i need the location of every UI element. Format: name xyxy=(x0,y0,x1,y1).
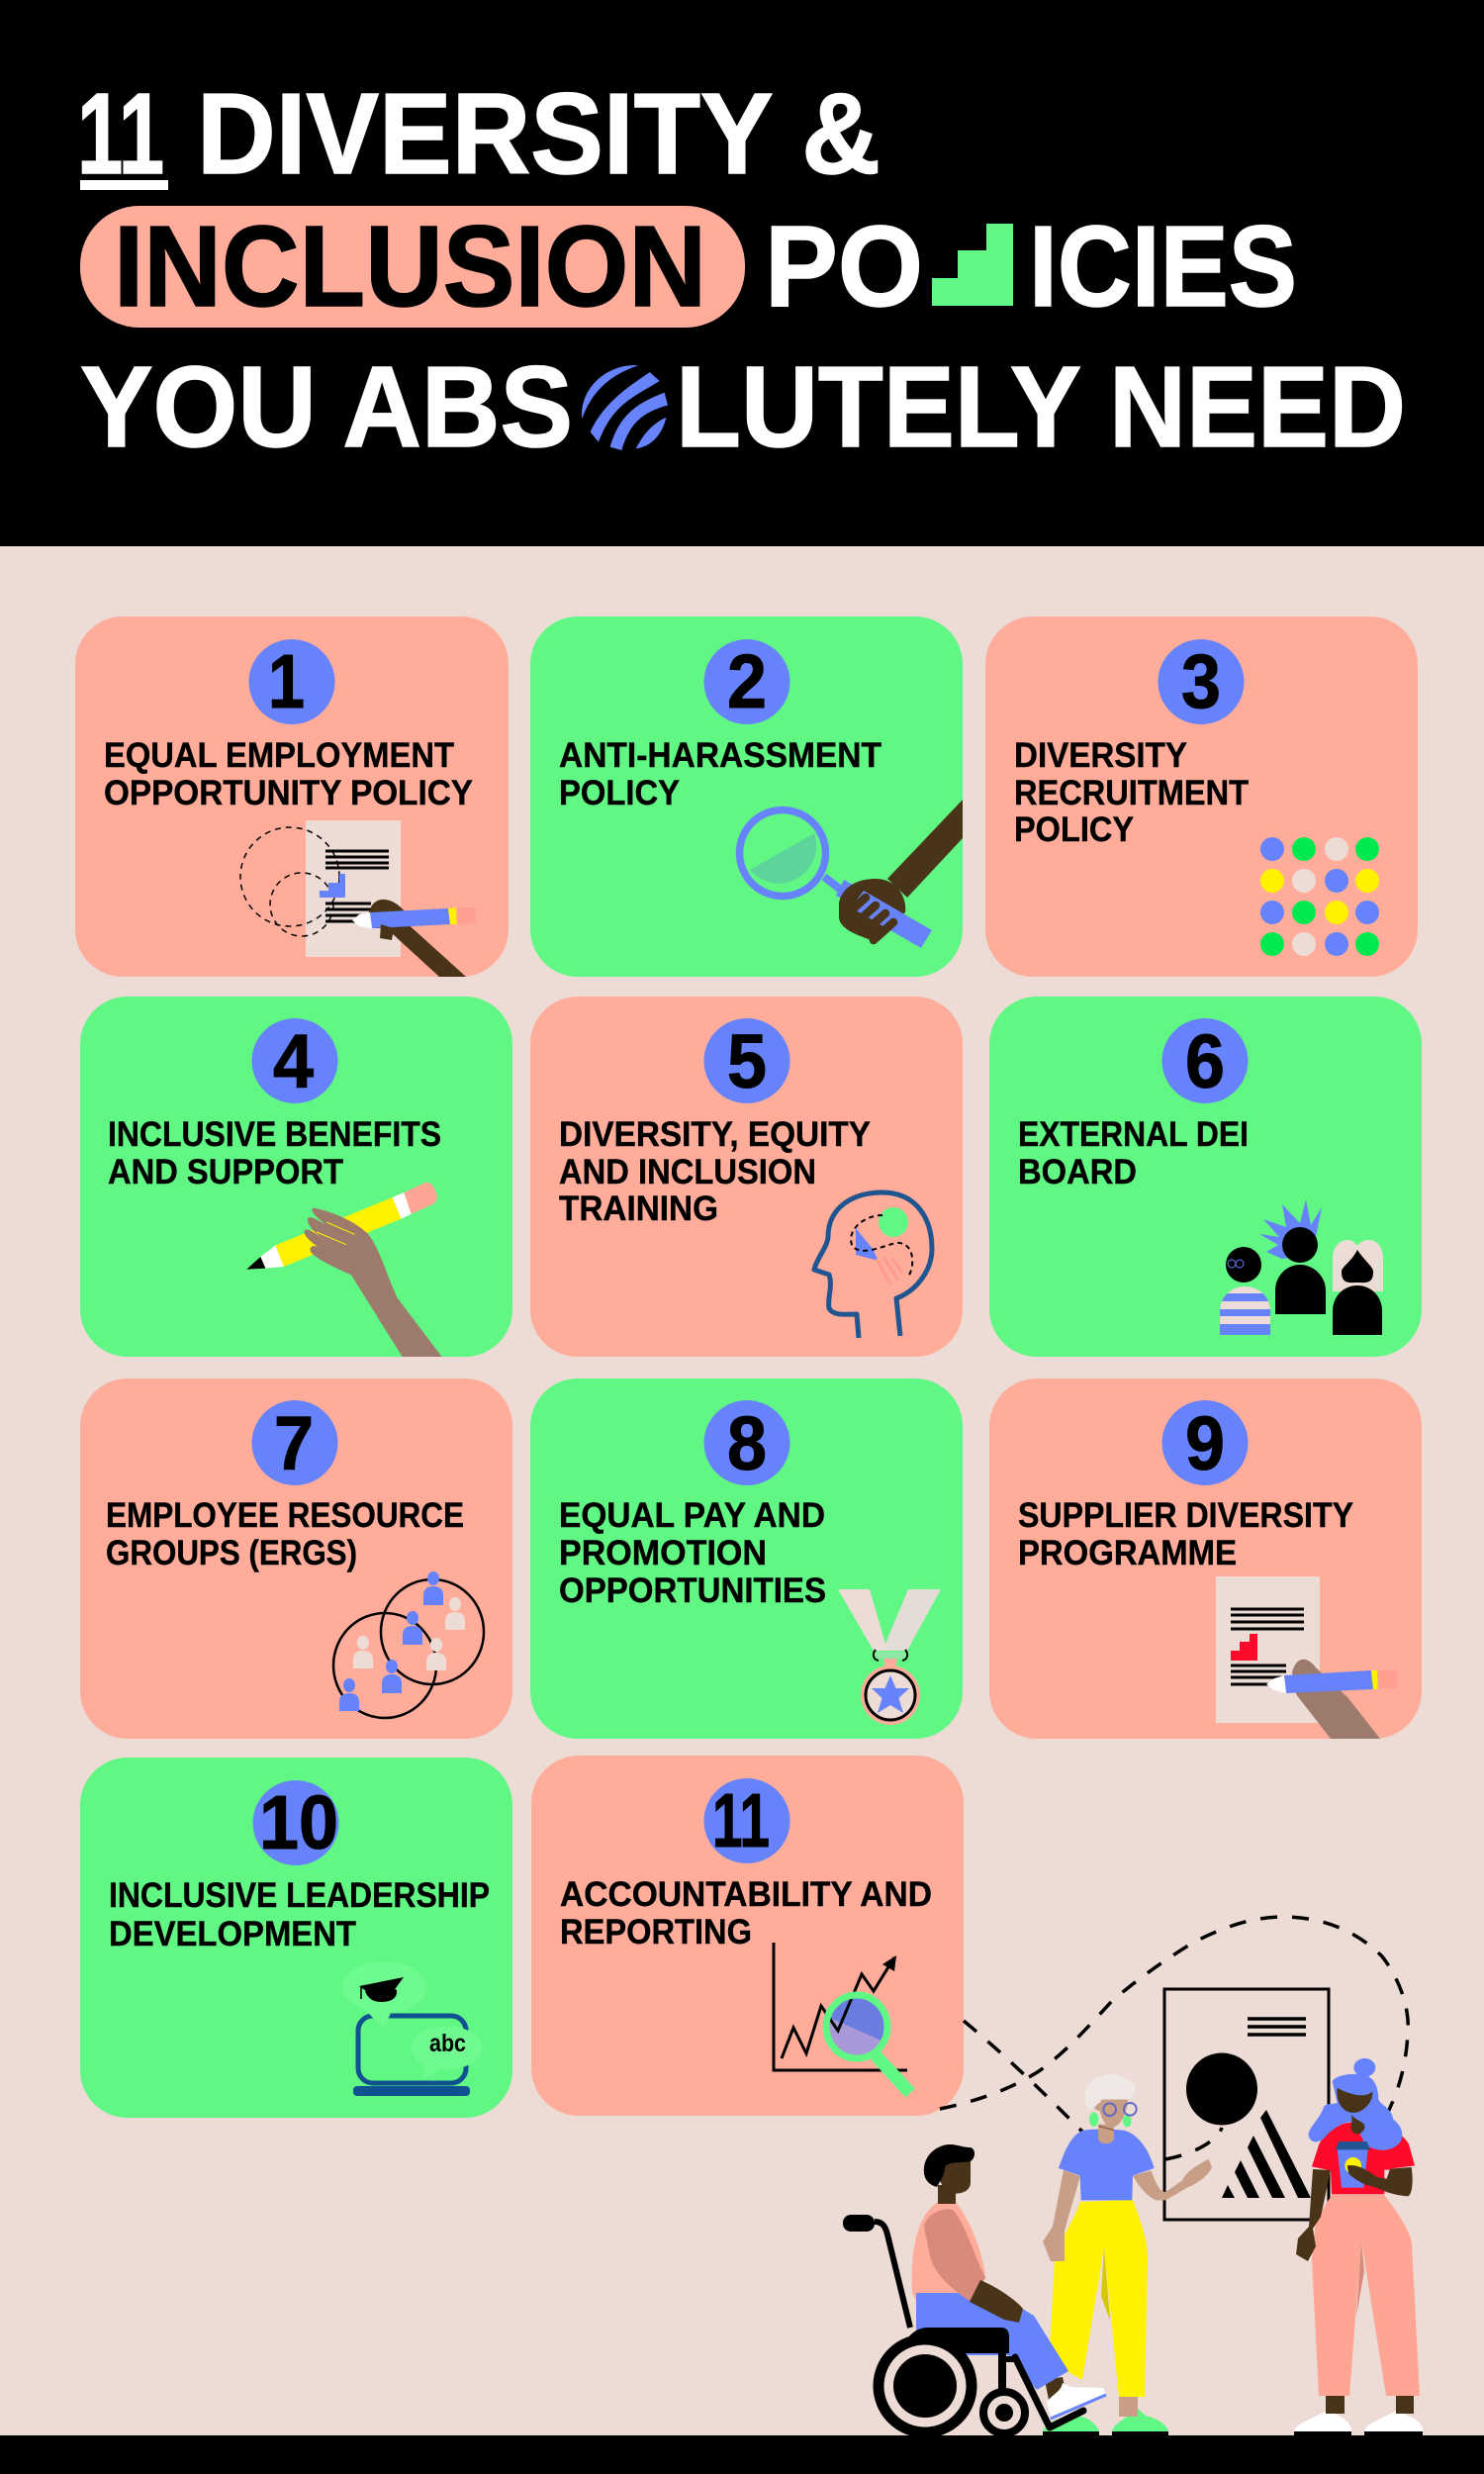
icon: three board members xyxy=(1220,1199,1383,1335)
title number 11 underlined: 11 xyxy=(77,69,164,198)
heading 4: AND SUPPORT xyxy=(108,1153,343,1191)
dashed path across scene xyxy=(940,1917,1408,2160)
title: YOU ABS xyxy=(80,342,573,471)
badge 2 xyxy=(704,639,789,724)
heading 2: POLICY xyxy=(559,774,680,812)
heading 6 xyxy=(1018,1115,1249,1191)
heading 9 xyxy=(1018,1496,1353,1572)
heading 1: OPPORTUNITY POLICY xyxy=(104,774,473,812)
footer band xyxy=(0,2435,1484,2474)
heading 10 xyxy=(109,1876,490,1953)
heading 8: PROMOTION xyxy=(559,1534,767,1572)
title: DIVERSITY & xyxy=(197,69,881,198)
heading 11 xyxy=(560,1875,932,1951)
badge 5: 5 xyxy=(727,1019,767,1104)
heading 4 xyxy=(108,1115,441,1191)
heading 3: RECRUITMENT xyxy=(1014,774,1249,812)
title: ICIES xyxy=(1029,202,1297,331)
icon: dot grid xyxy=(1260,837,1379,956)
badge 9: 9 xyxy=(1185,1401,1225,1486)
heading 7 xyxy=(106,1496,464,1572)
icon: striped blue O xyxy=(582,365,668,450)
badge 4 xyxy=(251,1018,338,1104)
icon: hand holding magnifier xyxy=(740,800,963,948)
icon: medal xyxy=(838,1589,941,1725)
icon: head with brain shapes xyxy=(814,1192,932,1338)
heading 3: DIVERSITY xyxy=(1014,736,1187,775)
panel: 7 employee resource groups xyxy=(80,1379,512,1739)
heading 5 xyxy=(559,1115,871,1228)
panel: 3 diversity recruitment policy xyxy=(985,617,1418,977)
seat and wheels xyxy=(879,2328,1083,2433)
heading 10: DEVELOPMENT xyxy=(109,1915,356,1953)
heading 9: SUPPLIER DIVERSITY xyxy=(1018,1496,1353,1535)
panel: 10 inclusive leadership development xyxy=(80,1758,512,2118)
heading 3 xyxy=(1014,736,1249,849)
title: LUTELY NEED xyxy=(676,342,1406,471)
panel: 8 equal pay and promotion opportunities xyxy=(530,1379,963,1739)
heading 7: GROUPS (ERGS) xyxy=(106,1534,357,1572)
wheelchair push handle xyxy=(843,2215,910,2328)
heading 11: ACCOUNTABILITY AND xyxy=(560,1875,932,1914)
heading 1 xyxy=(104,736,473,812)
badge 4: 4 xyxy=(273,1019,314,1104)
badge 8 xyxy=(704,1400,789,1486)
icon: green stairs replacing L xyxy=(932,224,1013,306)
heading 6: BOARD xyxy=(1018,1153,1137,1191)
badge 8: 8 xyxy=(727,1401,767,1486)
icon: document and pen xyxy=(240,820,476,977)
badge 3: 3 xyxy=(1181,639,1221,724)
panel: 2 anti-harassment policy xyxy=(530,617,963,977)
badge 7 xyxy=(251,1400,338,1486)
icon: overlapping people circles xyxy=(333,1571,484,1718)
panel: 9 supplier diversity programme xyxy=(989,1379,1422,1739)
heading 5: DIVERSITY, EQUITY xyxy=(559,1115,871,1154)
badge 6 xyxy=(1161,1018,1249,1104)
heading 5: TRAINING xyxy=(559,1189,718,1228)
heading 6: EXTERNAL DEI xyxy=(1018,1115,1249,1154)
badge 10: 10 xyxy=(259,1780,338,1865)
title: PO xyxy=(765,202,923,331)
icon: document with red stairs and pen xyxy=(1216,1576,1398,1739)
badge 7: 7 xyxy=(274,1401,314,1486)
heading 8: OPPORTUNITIES xyxy=(559,1571,826,1610)
panel: 1 equal employment opportunity policy xyxy=(75,617,509,977)
panel: 5 diversity equity and inclusion training xyxy=(530,997,963,1357)
title xyxy=(77,69,1406,471)
heading 8 xyxy=(559,1496,826,1610)
panel: 4 inclusive benefits and support xyxy=(80,997,512,1357)
badge 3 xyxy=(1158,639,1245,724)
heading 10: INCLUSIVE LEADERSHIP xyxy=(109,1876,490,1915)
panel: 6 external DEI board xyxy=(989,997,1422,1357)
panel: 11 accountability and reporting xyxy=(531,1756,964,2116)
heading 5: AND INCLUSION xyxy=(559,1153,816,1191)
icon: laptop with graduation cap and abc bubbles: abc xyxy=(429,2030,466,2057)
figure: woman with blue hair and coffee xyxy=(1294,2058,1423,2435)
figure: woman in yellow trousers xyxy=(1043,2074,1212,2435)
heading 3: POLICY xyxy=(1014,810,1134,849)
heading 4: INCLUSIVE BENEFITS xyxy=(108,1115,441,1154)
heading 2 xyxy=(559,736,881,812)
badge 1 xyxy=(249,639,334,724)
heading 11: REPORTING xyxy=(560,1913,752,1951)
heading 7: EMPLOYEE RESOURCE xyxy=(106,1496,464,1535)
heading 8: EQUAL PAY AND xyxy=(559,1496,825,1535)
figure: man in wheelchair xyxy=(843,2144,1106,2433)
icon: laptop with graduation cap and abc bubbles xyxy=(341,1961,483,2096)
badge 5 xyxy=(704,1018,789,1104)
badge 11: 11 xyxy=(712,1778,770,1863)
heading 9: PROGRAMME xyxy=(1018,1534,1237,1572)
heading 2: ANTI-HARASSMENT xyxy=(559,736,881,775)
badge 6: 6 xyxy=(1185,1019,1225,1104)
badge 9 xyxy=(1161,1400,1249,1486)
badge 2: 2 xyxy=(727,639,767,724)
torso and legs xyxy=(912,2144,1106,2419)
poster on wall xyxy=(1164,1989,1329,2220)
heading 1: EQUAL EMPLOYMENT xyxy=(104,736,454,775)
icon: rising chart with magnifier xyxy=(774,1943,910,2093)
highlighted word pill: INCLUSION xyxy=(114,202,706,331)
icon: hand with yellow pencil xyxy=(246,1183,442,1357)
header band xyxy=(0,0,1484,546)
badge 1: 1 xyxy=(268,639,305,724)
